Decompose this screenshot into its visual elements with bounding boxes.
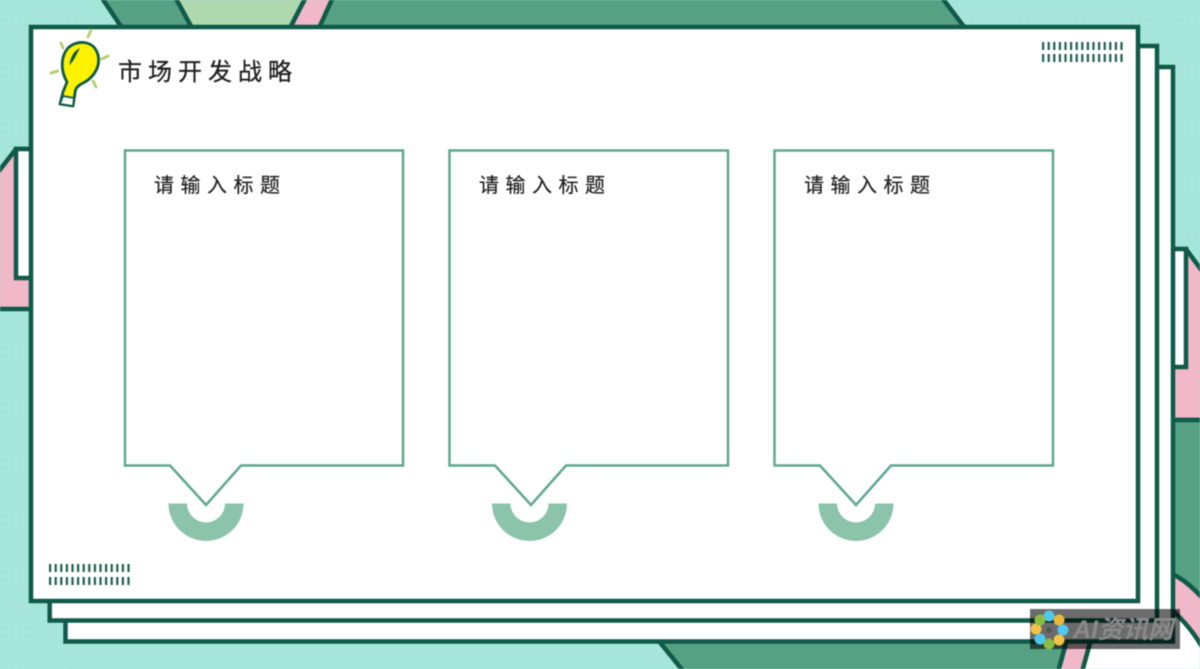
barcode decoration: bottom left <box>49 564 130 585</box>
left side tab <box>0 149 32 309</box>
icon: light bulb <box>51 30 108 106</box>
title: 市场开发战略 <box>118 59 298 86</box>
top background shapes <box>100 0 965 28</box>
watermark <box>1030 609 1180 650</box>
main white page <box>31 27 1138 601</box>
panel: callout 2 <box>450 150 728 505</box>
watermark text: AI资讯网 <box>1072 616 1177 644</box>
icon: half ring 1 <box>168 504 244 541</box>
right side tab <box>1170 249 1200 420</box>
icon: half ring 3 <box>818 504 894 541</box>
bottom right background shapes <box>658 420 1200 669</box>
icon: watermark flower <box>1030 610 1068 650</box>
callout 2 heading: 请输入标题 <box>479 174 612 197</box>
panel: callout 3 <box>774 150 1053 505</box>
stacked back page 2 <box>66 67 1173 642</box>
callout 3 heading: 请输入标题 <box>804 174 936 197</box>
stacked back page 1 <box>50 46 1157 620</box>
icon: half ring 2 <box>492 504 567 541</box>
barcode decoration: top right <box>1042 42 1123 62</box>
panel: callout 1 <box>125 150 403 505</box>
callout 1 heading: 请输入标题 <box>154 174 286 197</box>
